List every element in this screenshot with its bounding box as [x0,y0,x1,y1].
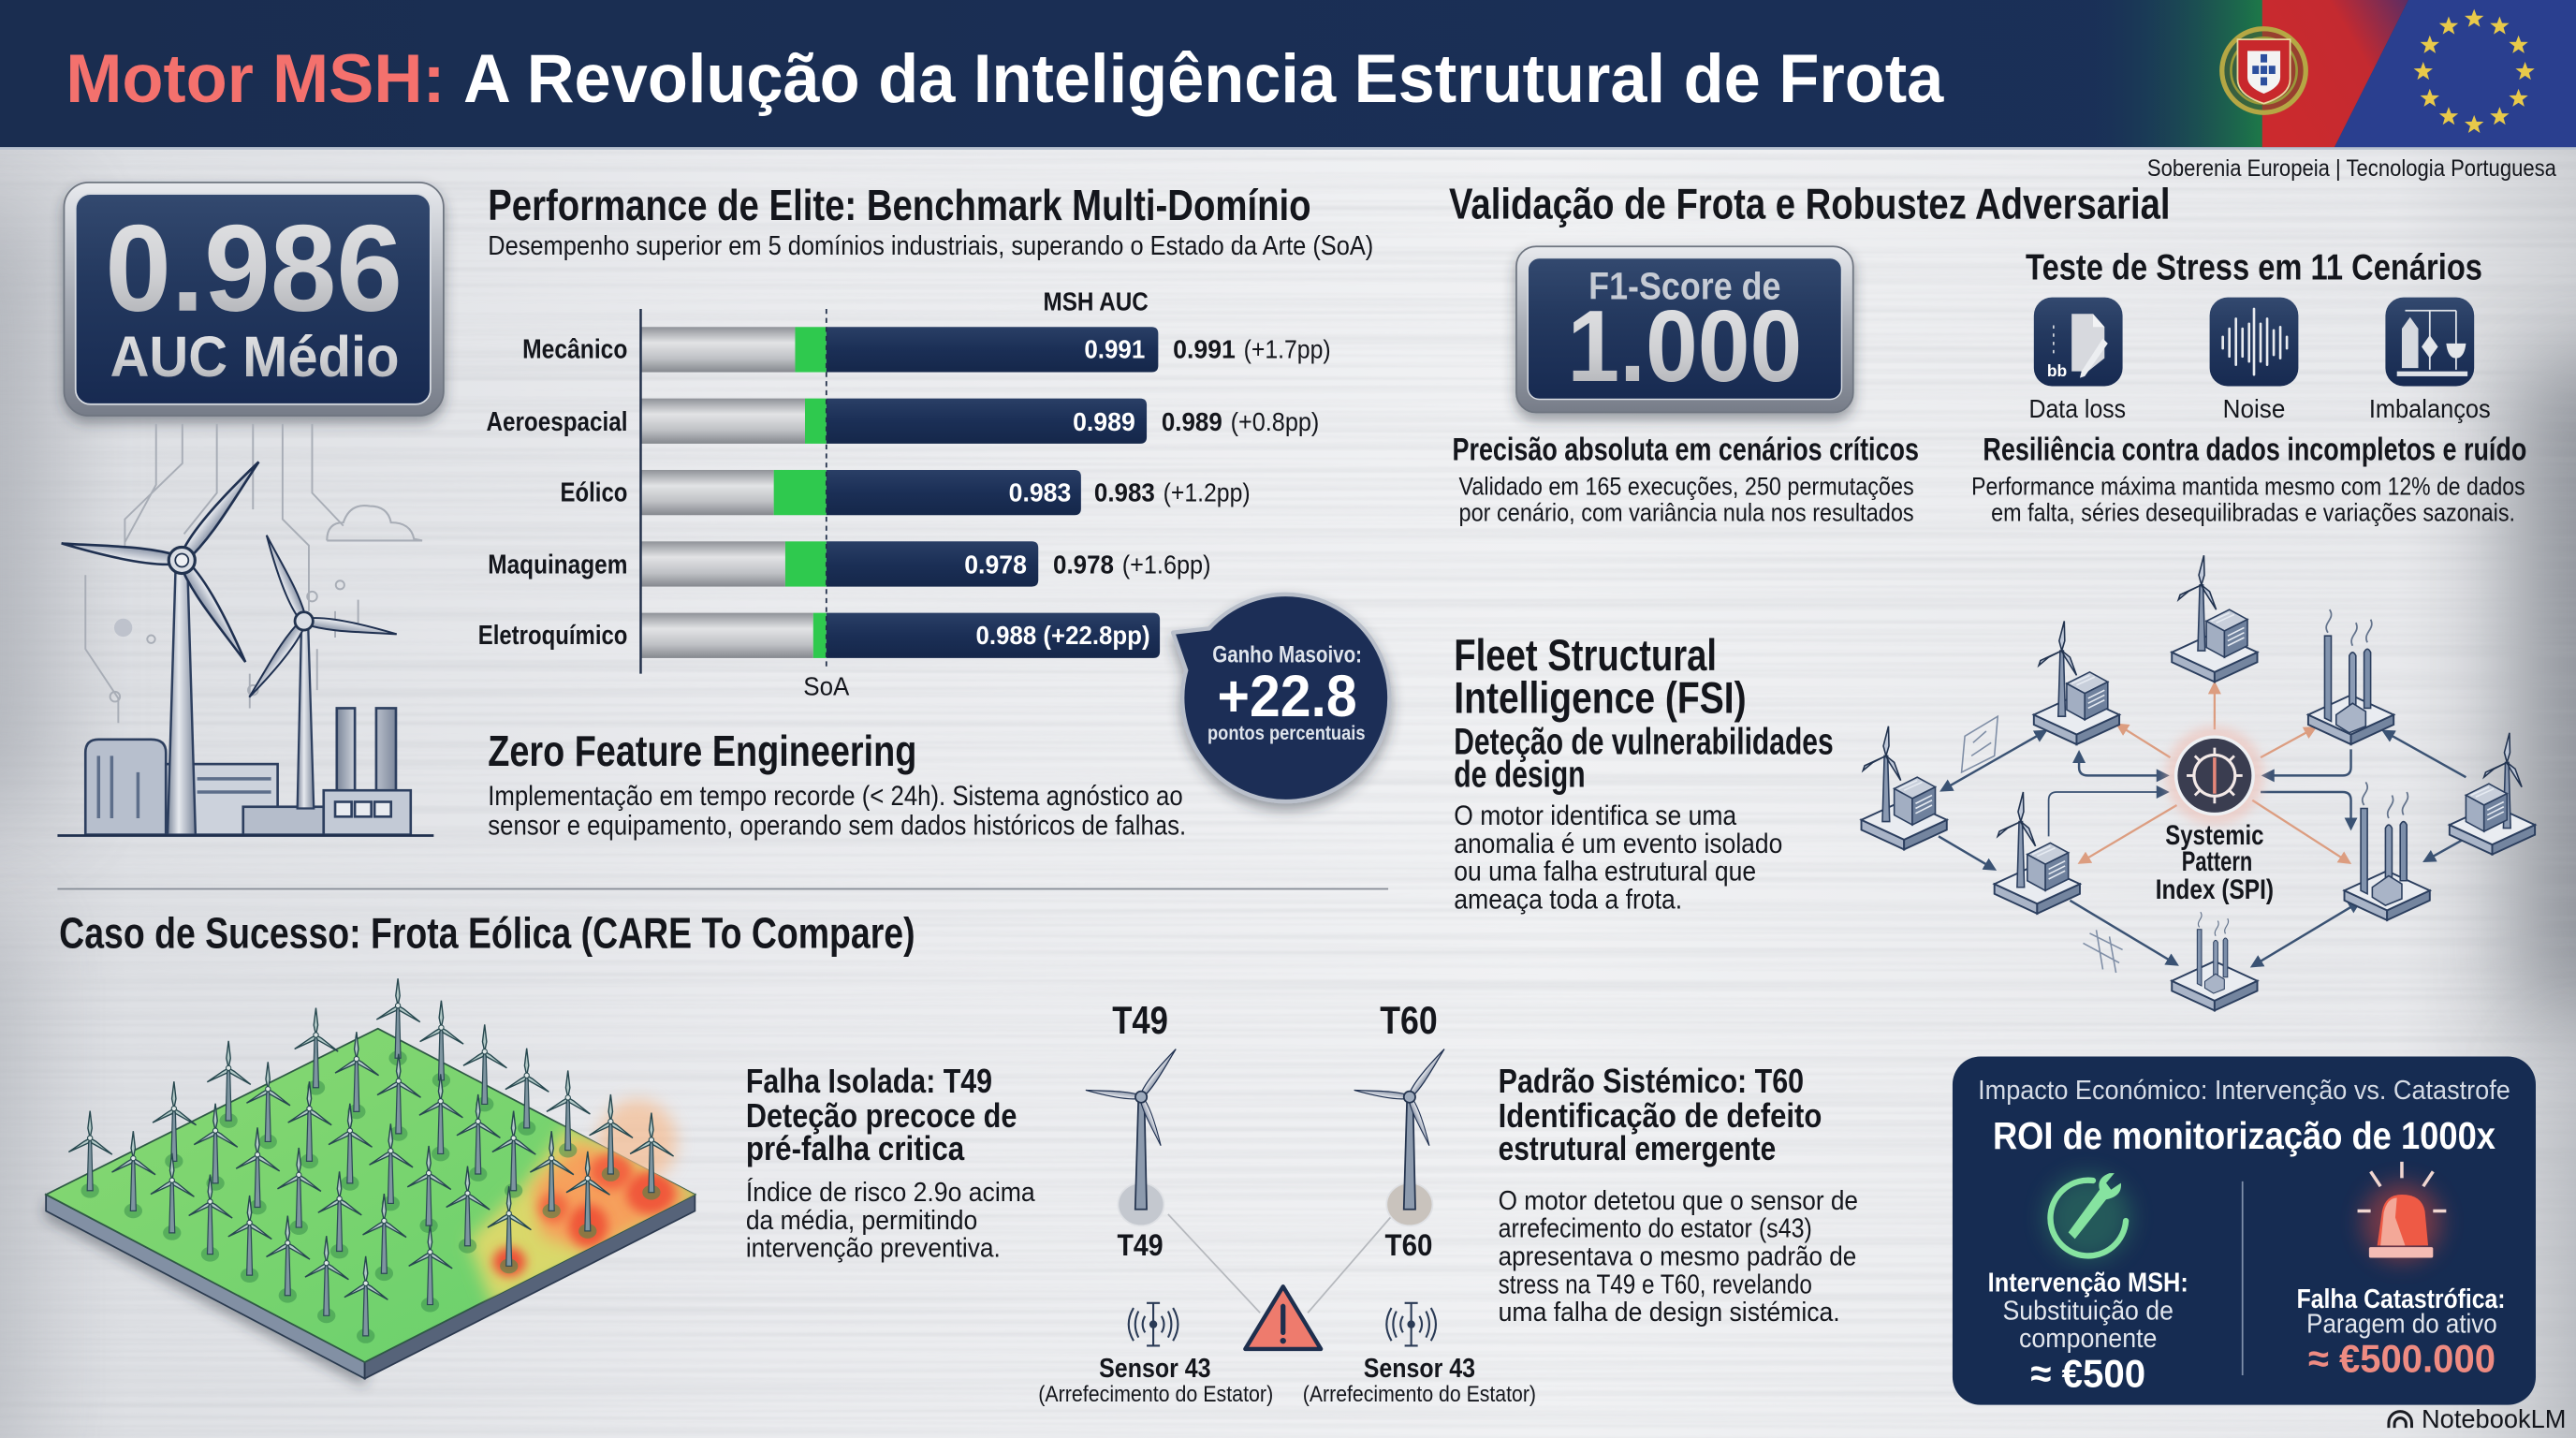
turbine T60: T60 [1385,1228,1432,1262]
label: systemic pattern index: Systemic [2165,820,2264,851]
icon: sensor right [1386,1303,1436,1345]
bar: Eólico: (+1.2pp) [1164,477,1251,506]
factory buildings [85,708,411,835]
text block: fleet structural intelligence: anomalia é um evento isolado [1454,829,1782,859]
turbine T49: T49 [1117,1228,1164,1262]
icon: red siren [2358,1162,2446,1262]
bar: Eólico: 0.983 [1009,477,1071,506]
circuit lines [85,424,422,723]
text block: padrão sistémico: apresentava o mesmo padrão de [1499,1241,1856,1271]
bar: Maquinagem [488,541,1211,587]
big turbine [61,457,264,835]
node: far right [2450,733,2535,855]
text block: falha isolada: pré-falha critica [746,1129,965,1167]
small turbine [245,534,398,809]
metric value: 0.986 [105,199,402,337]
metric label: AUC Médio [110,325,399,389]
text: intervenção MSH: Intervenção MSH: [1988,1269,2188,1299]
icon: SPI hub [2165,726,2264,825]
arrows: orange from hub [2080,683,2349,862]
node: lower right [2345,782,2430,920]
icon: data loss [2034,298,2123,386]
text block: falha isolada: Índice de risco 2.9o acima [746,1177,1036,1208]
SoA reference line [826,309,827,670]
ground line [57,834,433,836]
text block: fleet structural intelligence: Fleet Structural [1454,631,1717,681]
diagram: T49 and T60 shared sensor fault [1038,998,1536,1407]
text block: fleet structural intelligence: ou uma falha estrutural que [1454,857,1756,888]
node: far left [1862,726,1947,849]
text block: padrão sistémico [1499,1062,1858,1328]
text block: fleet structural intelligence: O motor identifica se uma [1454,800,1736,831]
node: lower left [1995,792,2080,914]
Portuguese flag colours [2073,0,2408,147]
bar: Mecânico: Mecânico [522,335,627,365]
icon: sensor left [1129,1303,1178,1345]
panel: F1-score metric: 1.000 [1567,289,1802,404]
subheading: performance: Desempenho superior em 5 domínios industriais, superando o Estado da Arte (SoA) [488,231,1373,261]
bar: Maquinagem: (+1.6pp) [1122,550,1211,580]
panel: economic impact [1953,1057,2536,1405]
label: noise: Noise [2223,394,2285,423]
icon: warning triangle [1245,1286,1321,1349]
callout: ganho massivo [1173,594,1389,801]
callout: ganho massivo: pontos percentuais [1208,723,1365,744]
label: imbalanços: Imbalanços [2369,394,2491,423]
node: upper right [2308,609,2393,744]
heading: teste de stress: Teste de Stress em 11 Cenários [2026,247,2482,287]
bar: Aeroespacial: 0.989 [1073,407,1135,436]
text block: zero feature engineering: Zero Feature Engineering [488,726,916,775]
turbine T60 [1354,998,1447,1262]
sketches [1962,716,2123,973]
text: falha catastrófica: Falha Catastrófica: [2297,1284,2506,1314]
label: systemic pattern index [2156,820,2274,905]
text: falha catastrófica: Paragem do ativo [2306,1309,2497,1339]
text block: fleet structural intelligence: de design [1454,755,1586,796]
label: sensor 43 left: Sensor 43 [1099,1354,1211,1384]
diagram: fleet network with systemic pattern index [1862,555,2535,1010]
heat map [468,1125,707,1306]
bar: Eólico: 0.983 [1094,477,1155,506]
text block: fleet structural intelligence: ameaça toda a frota. [1454,885,1682,916]
title: A Revolução da Inteligência Estrutural de Frota [463,39,1944,117]
text block: falha isolada: Falha Isolada: T49 [746,1062,992,1100]
bar: Aeroespacial: 0.989 [1162,407,1222,436]
text block: resiliência [1971,432,2526,526]
text block: padrão sistémico: O motor detetou que o sensor de [1499,1186,1858,1216]
text: intervenção MSH [1988,1269,2188,1395]
text block: zero feature engineering [488,726,1186,842]
icon: data loss: bb [2047,361,2067,380]
turbine T60: T60 [1380,998,1438,1042]
bar: Eólico [560,470,1251,515]
text block: fleet structural intelligence: Intelligence (FSI) [1454,674,1747,724]
turbine T49 [1085,998,1178,1262]
heading: validação de frota: Validação de Frota e Robustez Adversarial [1449,179,2170,227]
panel: F1-score metric: F1-Score de [1588,264,1781,307]
arrows: blue connectors [1939,731,2466,966]
label: sensor 43 right [1303,1354,1536,1407]
turbine T49: T49 [1112,998,1168,1042]
text block: zero feature engineering: Implementação em tempo recorde (< 24h). Sistema agnóstico ao [488,781,1183,812]
icon: Portuguese coat of arms [2222,29,2305,112]
text block: padrão sistémico: uma falha de design sistémica. [1499,1298,1840,1328]
text block: fleet structural intelligence: Deteção de vulnerabilidades [1454,722,1834,763]
text block: falha isolada: da média, permitindo [746,1206,977,1236]
icon: noise waveform [2210,298,2298,386]
SoA label: SoA [803,671,850,700]
label: systemic pattern index: Pattern [2182,846,2252,877]
text block: padrão sistémico: stress na T49 e T60, revelando [1499,1269,1812,1299]
bar: Mecânico [522,327,1331,373]
bar: Mecânico: (+1.7pp) [1244,335,1331,364]
label: sensor 43 left [1038,1354,1273,1407]
header banner [0,0,2576,150]
heading: performance: Performance de Elite: Benchmark Multi-Domínio [488,181,1311,229]
bar: Eletroquímico [478,613,1160,658]
text block: padrão sistémico: estrutural emergente [1499,1129,1776,1167]
text block: padrão sistémico: Padrão Sistémico: T60 [1499,1062,1804,1100]
bar: Eletroquímico: 0.988 (+22.8pp) [976,621,1150,650]
icon: imbalances [2385,298,2474,386]
legend: MSH AUC: MSH AUC [1043,287,1149,316]
text block: precisão absoluta [1453,432,1919,526]
panel: F1-score metric [1516,246,1853,413]
bar: Mecânico: 0.991 [1173,335,1236,364]
icon: small gear blob [114,619,132,637]
label: sensor 43 right: (Arrefecimento do Estator) [1303,1383,1536,1407]
bar chart: MSH AUC vs SoA [478,287,1331,700]
text block: padrão sistémico: arrefecimento do estator (s43) [1499,1214,1812,1244]
text block: precisão absoluta: Precisão absoluta em cenários críticos [1453,432,1919,467]
turbines [68,978,674,1343]
bar: Maquinagem: 0.978 [964,550,1027,580]
callout: ganho massivo: Ganho Masoivo: [1212,642,1362,668]
bar: Aeroespacial: (+0.8pp) [1231,407,1319,436]
heading: caso de sucesso: Caso de Sucesso: Frota Eólica (CARE To Compare) [59,909,915,958]
node: upper left [2034,621,2119,744]
text block: precisão absoluta: Validado em 165 execuções, 250 permutações [1459,471,1914,500]
label: systemic pattern index: Index (SPI) [2156,874,2274,905]
chart: isometric turbine heat map [46,978,707,1379]
illustration: wind turbines and factory with circuits [57,424,433,835]
node: bottom [2172,912,2258,1010]
title: Motor MSH: [66,39,446,117]
text block: falha isolada [746,1062,1036,1264]
text: intervenção MSH: ≈ €500 [2030,1351,2145,1395]
icon: EU stars [2414,9,2535,133]
bar: Eletroquímico: Eletroquímico [478,621,627,651]
panel: AUC medio metric [64,183,444,416]
connector lines [1168,1214,1393,1313]
EU flag colours [2334,0,2576,147]
text: intervenção MSH: componente [2019,1324,2157,1354]
label: sensor 43 left: (Arrefecimento do Estator) [1038,1383,1273,1407]
bar: Eólico: Eólico [560,477,627,507]
node: top [2172,555,2258,682]
bar: Maquinagem: Maquinagem [488,550,627,580]
panel heading: ROI de monitorização de 1000x [1993,1114,2496,1157]
text block: padrão sistémico: Identificação de defeito [1499,1096,1822,1135]
field base [46,1029,695,1379]
text block: precisão absoluta: por cenário, com variância nula nos resultados [1459,497,1914,526]
label: data loss: Data loss [2029,394,2126,423]
callout: ganho massivo: +22.8 [1218,664,1357,729]
icon: wrench in green ring [2045,1173,2130,1260]
bar: Aeroespacial [487,399,1319,444]
axis [639,309,641,674]
text: falha catastrófica [2297,1284,2506,1381]
bar: Maquinagem: 0.978 [1053,550,1114,580]
label: sensor 43 right: Sensor 43 [1364,1354,1475,1384]
text block: fleet structural intelligence [1454,631,1834,916]
bar: Mecânico: 0.991 [1084,335,1145,364]
heat glow outside field [598,1099,677,1184]
text block: falha isolada: intervenção preventiva. [746,1234,1001,1264]
logo: NotebookLM: NotebookLM [2422,1404,2566,1433]
panel subtitle: Impacto Económico: Intervenção vs. Catastrofe [1978,1076,2510,1106]
text block: zero feature engineering: sensor e equipamento, operando sem dados históricos de falhas. [488,811,1186,842]
bar: Aeroespacial: Aeroespacial [487,407,627,437]
text: intervenção MSH: Substituição de [2002,1296,2174,1326]
text block: falha isolada: Deteção precoce de [746,1096,1017,1135]
text: falha catastrófica: ≈ €500.000 [2308,1337,2496,1381]
